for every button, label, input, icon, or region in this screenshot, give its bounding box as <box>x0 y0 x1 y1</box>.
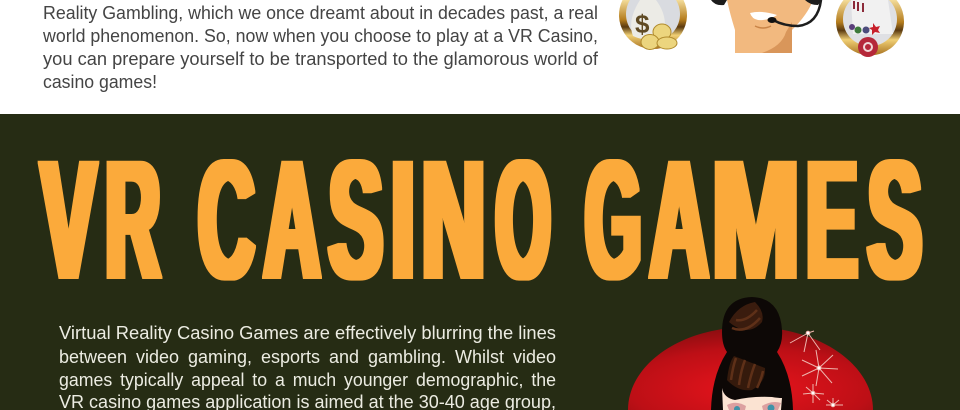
face <box>722 388 782 410</box>
title: C <box>198 125 254 314</box>
intro text block: you can prepare yourself to be transported to the glamorous world of <box>43 49 599 69</box>
body text block: Virtual Reality Casino Games are effectively blurring the lines <box>59 323 556 343</box>
title: N <box>422 125 485 314</box>
eyes <box>727 403 746 410</box>
icon detail: dollar sign: $ <box>635 9 650 39</box>
title <box>41 125 922 314</box>
title: A <box>650 125 708 314</box>
icon: gold medallion with money bag <box>619 0 687 50</box>
icon detail: red poker chip <box>858 37 878 57</box>
title: R <box>106 125 160 314</box>
title: A <box>264 125 320 314</box>
icon detail: headset ear cups and microphone <box>711 0 727 5</box>
icon detail: gold coins <box>641 24 677 50</box>
hair highlights <box>727 302 765 390</box>
title: G <box>585 125 641 314</box>
title: I <box>391 125 415 314</box>
title: V <box>41 125 96 314</box>
icon detail: chip stacks <box>849 23 880 35</box>
icon: headset operator face <box>711 0 822 53</box>
body text block: games typically appeal to a much younger demographic, the <box>59 370 556 390</box>
title: M <box>712 125 800 314</box>
intro text block <box>42 3 599 92</box>
panel: intro white background <box>0 0 960 114</box>
panel: dark games section <box>0 114 960 410</box>
icon detail: card pips <box>853 1 864 12</box>
intro text block: casino games! <box>43 72 157 92</box>
body text block: between video gaming, esports and gambling. Whilst video <box>59 347 556 367</box>
body text block <box>59 323 556 410</box>
red circle backdrop <box>628 327 873 410</box>
beehive hair <box>711 297 793 410</box>
intro text block: world phenomenon. So, now when you choose to play at a VR Casino, <box>42 26 598 46</box>
illustration: woman with beehive hair on red circle <box>628 297 873 410</box>
title: S <box>329 125 383 314</box>
title: O <box>496 125 550 314</box>
intro text block: Reality Gambling, which we once dreamt about in decades past, a real <box>43 3 598 23</box>
icon: gold medallion with cards and chips <box>836 0 904 57</box>
title: E <box>806 125 858 314</box>
sparkles <box>790 331 843 407</box>
